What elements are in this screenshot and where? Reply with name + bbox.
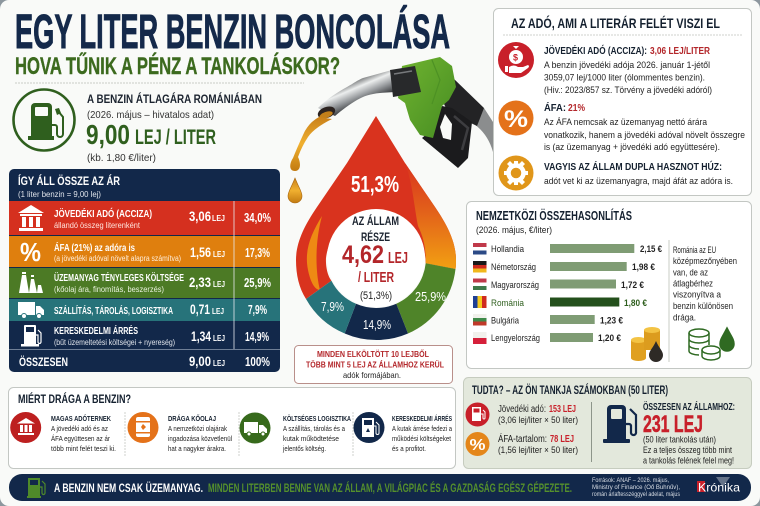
euro note: (kb. 1,80 €/liter) bbox=[87, 152, 156, 164]
double benefit text: adót vet ki az üzemanyagra, majd áfát az adóra is. bbox=[544, 176, 733, 187]
row: total: LEJ bbox=[213, 358, 225, 368]
total note bbox=[643, 434, 734, 466]
comparison note: átlagbérhez bbox=[673, 278, 713, 290]
row: fuel cost: (kőolaj ára, finomítás, beszerzés) bbox=[54, 285, 164, 294]
bar: Románia bbox=[473, 296, 648, 309]
excise value: 3,06 LEJ/LITER bbox=[650, 45, 710, 57]
panel note: (2026. május, €/liter) bbox=[476, 225, 552, 236]
VAT amount: 78 LEJ bbox=[550, 434, 574, 445]
panel: the tax bbox=[494, 8, 752, 196]
bar: Hollandia bbox=[473, 243, 663, 255]
row: retail margin: 14,9% bbox=[245, 330, 269, 344]
row: fuel cost: ÜZEMANYAG TÉNYLEGES KÖLTSÉGE bbox=[54, 271, 184, 284]
excise amount: 153 LEJ bbox=[549, 404, 576, 415]
double benefit heading: VAGYIS AZ ÁLLAM DUPLA HASZNOT HÚZ: bbox=[544, 160, 722, 173]
item: high taxes bbox=[10, 412, 116, 453]
table subheading: (1 liter benzin = 9,00 lej) bbox=[18, 189, 101, 199]
bar: Románia: 1,80 € bbox=[624, 298, 648, 309]
bar: Németország bbox=[473, 261, 656, 273]
row: excise: állandó összeg literenként bbox=[54, 221, 141, 230]
item: high taxes: ÁFA együttesen az ár bbox=[51, 434, 110, 443]
VAT text: Az ÁFA nemcsak az üzemanyag nettó árára bbox=[544, 117, 708, 128]
item: crude oil: A nemzetközi olajárak bbox=[168, 424, 227, 433]
date note: (2026. május – hivatalos adat) bbox=[87, 109, 214, 121]
segment: margin bbox=[345, 304, 408, 340]
callout: every 10 lei: MINDEN ELKÖLTÖTT 10 LEJBŐL bbox=[317, 348, 429, 359]
comparison note: van, de az bbox=[673, 268, 708, 278]
chart: state share drop bbox=[296, 116, 456, 340]
center text: RÉSZE bbox=[361, 229, 390, 244]
label 25.9: 25,9% bbox=[415, 289, 446, 304]
sources bbox=[592, 478, 680, 498]
item: high taxes: A jövedéki adó és az bbox=[51, 424, 108, 433]
label 14.9: 14,9% bbox=[363, 317, 391, 332]
segment: logistics bbox=[306, 281, 356, 334]
row: VAT: 1,56 bbox=[190, 244, 211, 260]
sources: Ministry of Finance (Oő Buhnűv), bbox=[592, 485, 680, 491]
panel heading: NEMZETKÖZI ÖSSZEHASONLÍTÁS bbox=[476, 208, 632, 223]
row: logistics: LEJ bbox=[212, 306, 224, 316]
row: excise: 34,0% bbox=[244, 211, 271, 225]
VAT text bbox=[544, 117, 745, 153]
total note: Ez a teljes összeg több mint bbox=[643, 445, 732, 455]
banner text green: MINDEN LITERBEN BENNE VAN AZ ÁLLAM, A VILÁGPIAC ÉS A GAZDASÁG EGÉSZ GÉPEZETE. bbox=[208, 480, 572, 495]
comparison note: viszonyítva a bbox=[673, 290, 722, 300]
total note: a tankolás felének felel meg! bbox=[643, 456, 734, 466]
item: crude oil: ingadozása közvetlenül bbox=[168, 434, 232, 443]
icon: percent bbox=[498, 100, 534, 136]
icon: red pump bbox=[466, 402, 490, 426]
center text: 4,62 bbox=[342, 241, 384, 269]
bar: Magyarország: Magyarország bbox=[491, 280, 539, 291]
segment: tax share bbox=[296, 116, 456, 299]
item: retail margin: A kutak árrése fedezi a bbox=[392, 424, 453, 433]
panel: price breakdown table bbox=[9, 169, 280, 372]
comparison note: benzin különösen bbox=[673, 301, 733, 312]
row: VAT: ÁFA (21%) az adóra is bbox=[54, 241, 135, 254]
bar: Hollandia: Hollandia bbox=[491, 244, 525, 255]
center text: LEJ bbox=[388, 250, 408, 267]
average price block bbox=[14, 90, 262, 164]
center circle bbox=[327, 209, 425, 307]
center text: / LITER bbox=[358, 269, 394, 286]
comparison note: drága. bbox=[673, 312, 696, 324]
row: VAT: (a jövedéki adóval növelt alapra számítva) bbox=[54, 254, 181, 263]
item: logistics: A szállítás, tárolás és a bbox=[283, 424, 346, 433]
callout: every 10 lei: TÖBB MINT 5 LEJ AZ ÁLLAMHOZ KERÜL bbox=[306, 360, 444, 370]
bar: Németország: Németország bbox=[491, 262, 536, 273]
item: retail margin bbox=[354, 412, 453, 453]
item: retail margin: és a profitot. bbox=[392, 444, 426, 453]
panel: why expensive bbox=[8, 388, 456, 468]
item: logistics: KÖLTSÉGES LOGISZTIKA bbox=[283, 414, 351, 423]
row: excise: 3,06 bbox=[189, 208, 211, 224]
VAT value: 21% bbox=[568, 102, 586, 114]
row: total: ÖSSZESEN bbox=[19, 354, 68, 369]
bar: Románia: Románia bbox=[491, 298, 525, 309]
row: fuel cost: 2,33 bbox=[189, 274, 211, 290]
row: retail margin: LEJ bbox=[213, 333, 225, 343]
center text: (51,3%) bbox=[360, 290, 392, 302]
panel: international comparison bbox=[466, 202, 752, 368]
row: retail margin: 1,34 bbox=[191, 328, 211, 344]
comparison note bbox=[673, 245, 737, 324]
row: excise: JÖVEDÉKI ADÓ (ACCIZA) bbox=[54, 207, 152, 220]
row: excise: LEJ bbox=[212, 213, 225, 223]
icon: navy pump bbox=[603, 405, 636, 443]
row: VAT: % bbox=[20, 237, 41, 267]
panel: did you know bbox=[464, 378, 752, 468]
icon: money hand: $ bbox=[513, 52, 518, 62]
excise text: A benzin jövedéki adója 2026. január 1-jétől bbox=[544, 60, 710, 71]
title: EGY LITER BENZIN BONCOLÁSA bbox=[15, 5, 450, 59]
icon: banner pump bbox=[27, 478, 45, 498]
row: total: 9,00 bbox=[189, 353, 211, 369]
comparison note: középmezőnyében bbox=[673, 256, 737, 267]
banner text white: A BENZIN NEM CSAK ÜZEMANYAG. bbox=[54, 480, 203, 495]
bar: Hollandia: 2,15 € bbox=[640, 244, 663, 255]
excise text bbox=[544, 60, 712, 96]
label 51.3: 51,3% bbox=[351, 171, 399, 197]
orange highlight left bbox=[307, 216, 322, 290]
panel heading: TUDTA? – AZ ÖN TANKJA SZÁMOKBAN (50 LITER) bbox=[472, 384, 668, 397]
bar: Lengyelország: 1,20 € bbox=[598, 333, 622, 344]
row: logistics: SZÁLLÍTÁS, TÁROLÁS, LOGISZTIKA bbox=[54, 304, 173, 317]
bar: Magyarország bbox=[473, 278, 645, 291]
bar: Bulgária bbox=[473, 314, 624, 326]
price unit: LEJ / LITER bbox=[135, 126, 216, 149]
row: retail margin: KERESKEDELMI ÁRRÉS bbox=[54, 324, 138, 337]
row: fuel cost bbox=[9, 268, 280, 298]
icon: money hand bbox=[498, 42, 534, 78]
VAT calc: (1,56 lej/liter × 50 liter) bbox=[498, 445, 578, 456]
row: logistics: 7,9% bbox=[248, 303, 267, 317]
bar: Bulgária: 1,23 € bbox=[600, 316, 624, 326]
row: VAT: 17,3% bbox=[245, 246, 270, 260]
oil stream bbox=[290, 117, 332, 171]
callout: every 10 lei bbox=[294, 346, 452, 384]
row: total bbox=[19, 353, 270, 369]
item: crude oil bbox=[128, 412, 232, 453]
bar: Magyarország: 1,72 € bbox=[621, 280, 645, 291]
excise text: 3059,07 lej/1000 liter (ólommentes benzin). bbox=[544, 72, 705, 84]
row: total: 100% bbox=[245, 355, 270, 369]
VAT text: is (az üzemanyag + jövedéki adó együttesére). bbox=[544, 142, 720, 153]
center text: AZ ÁLLAM bbox=[352, 213, 399, 228]
icon: fuel pump in circle bbox=[14, 90, 74, 150]
comparison note: Románia az EU bbox=[673, 245, 716, 256]
bar chart bbox=[473, 243, 663, 344]
item: high taxes: több mint felét teszi ki. bbox=[51, 444, 116, 453]
excise line: Jövedéki adó: bbox=[498, 404, 546, 415]
bar: Lengyelország: Lengyelország bbox=[491, 333, 540, 344]
segment: fuel cost bbox=[396, 263, 456, 334]
icon: orange percent bbox=[466, 432, 490, 456]
item: crude oil: hat a nagyker árakra. bbox=[168, 444, 226, 453]
VAT line: ÁFA-tartalom: bbox=[498, 432, 547, 445]
item: crude oil: DRÁGA KŐOLAJ bbox=[168, 414, 216, 423]
icon: green coins and drop bbox=[689, 328, 734, 360]
table heading: ÍGY ÁLL ÖSSZE AZ ÁR bbox=[18, 173, 120, 188]
item: logistics: jelentős költség. bbox=[282, 444, 326, 453]
subtitle: HOVA TŰNIK A PÉNZ A TANKOLÁSKOR? bbox=[15, 52, 340, 80]
logo: Krónika: Krónika bbox=[698, 480, 740, 494]
total amount: 231 LEJ bbox=[643, 411, 703, 438]
row: retail margin: (bűt üzemeltetési költségei + nyereség) bbox=[54, 338, 175, 347]
row: VAT bbox=[9, 236, 280, 267]
bar: Németország: 1,98 € bbox=[632, 262, 656, 273]
label 7.9: 7,9% bbox=[321, 299, 344, 314]
orange highlight right bbox=[405, 163, 456, 269]
row: fuel cost: LEJ bbox=[213, 279, 225, 289]
row: fuel cost: 25,9% bbox=[244, 276, 271, 290]
icon: gear bbox=[498, 156, 534, 190]
oil drop bbox=[288, 178, 302, 203]
excise text: (Hiv.: 2023/857 sz. Törvény a jövedéki adóról) bbox=[544, 85, 712, 96]
VAT heading: ÁFA: bbox=[544, 101, 566, 114]
row: retail margin bbox=[21, 324, 269, 347]
bar: Bulgária: Bulgária bbox=[491, 316, 520, 326]
callout: every 10 lei: adók formájában. bbox=[343, 370, 401, 380]
price: 9,00 bbox=[86, 119, 130, 150]
item: retail margin: KERESKEDELMI ÁRRÉS bbox=[392, 414, 452, 423]
excise calc: (3,06 lej/liter × 50 liter) bbox=[498, 415, 578, 426]
excise heading: JÖVEDÉKI ADÓ (ACCIZA): bbox=[544, 44, 647, 57]
bottom banner bbox=[9, 474, 751, 501]
icon: gold coins and oil bbox=[631, 327, 663, 362]
sources: Források: ANAF – 2026. május, bbox=[592, 478, 669, 484]
item: logistics: kutak működtetése bbox=[283, 434, 339, 443]
total note: (50 liter tankolás után) bbox=[643, 434, 716, 444]
icon: percent: % bbox=[504, 106, 528, 133]
illustration: fuel nozzle and oil bbox=[288, 57, 493, 203]
bar: Lengyelország bbox=[473, 332, 622, 344]
item: retail margin: működési költségeket bbox=[392, 434, 452, 443]
item: high taxes: MAGAS ADÓTERNEK bbox=[51, 414, 111, 423]
row: logistics bbox=[9, 299, 280, 321]
icon: orange percent: % bbox=[470, 437, 486, 454]
sources: román árlaftesszéggyel adelat, május bbox=[592, 492, 680, 498]
row: VAT: LEJ bbox=[213, 249, 225, 259]
row: excise bbox=[9, 201, 280, 235]
center text bbox=[342, 213, 408, 302]
item: logistics bbox=[240, 412, 351, 453]
heading: A BENZIN ÁTLAGÁRA ROMÁNIÁBAN bbox=[87, 91, 262, 106]
row: logistics: 0,71 bbox=[190, 301, 210, 317]
panel heading: MIÉRT DRÁGA A BENZIN? bbox=[18, 391, 131, 406]
